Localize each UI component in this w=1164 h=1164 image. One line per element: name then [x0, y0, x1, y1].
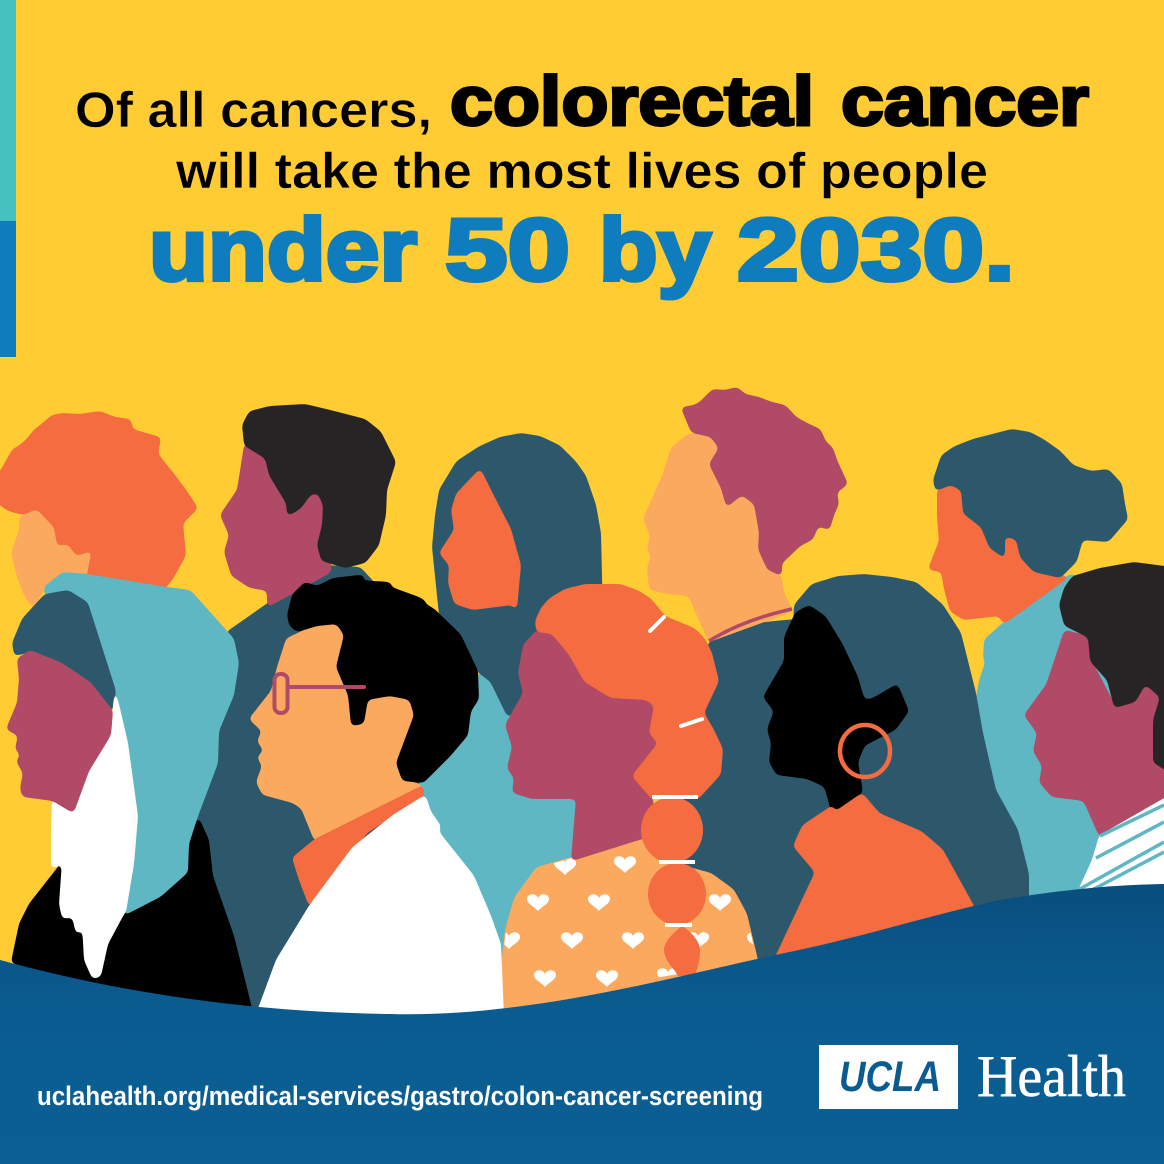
person: plum short hair, peach face	[644, 388, 900, 965]
person: man with glasses, white coat	[250, 575, 503, 1016]
logo: UCLA Health: Health	[977, 1043, 1126, 1109]
headline line 1: cancer	[841, 62, 1089, 140]
person: dark hair man, plum face	[175, 405, 480, 1012]
headline	[75, 62, 1089, 299]
person: long hair woman, orange face	[420, 434, 602, 1010]
person: orange curly hair	[0, 412, 197, 607]
wave footer band	[0, 884, 1164, 1164]
accent bar	[0, 0, 16, 357]
person: orange hair woman, plum face, heart dress	[497, 585, 769, 1010]
headline line 3: 2030.	[737, 200, 1015, 299]
headline line 3: under	[149, 200, 417, 299]
headline line 1	[75, 62, 1089, 140]
logo: UCLA Health: UCLA	[839, 1053, 941, 1101]
person: long hair woman, black face, hoop earring	[764, 575, 1028, 970]
earring	[840, 725, 890, 777]
logo: UCLA Health	[819, 1043, 1126, 1109]
person: teal bun hair, orange face	[929, 430, 1164, 905]
person: front left, headscarf, white hair	[7, 573, 252, 1012]
headline line 2: will take the most lives of people	[175, 143, 988, 199]
striped shirt	[1070, 790, 1164, 910]
headline line 3: 50	[445, 200, 570, 299]
person: right edge, plum face, striped shirt	[1025, 563, 1164, 910]
footer url: uclahealth.org/medical-services/gastro/colon-cancer-screening	[37, 1081, 763, 1111]
glasses	[274, 674, 364, 713]
braid	[641, 617, 706, 976]
headline line 1: colorectal	[450, 62, 814, 140]
headline line 3	[149, 200, 1015, 299]
heart dress	[497, 836, 769, 1010]
headline line 1: Of all cancers,	[75, 82, 432, 138]
necklace	[709, 609, 792, 641]
illustration: crowd of people	[0, 388, 1164, 1016]
headline line 3: by	[599, 200, 711, 299]
